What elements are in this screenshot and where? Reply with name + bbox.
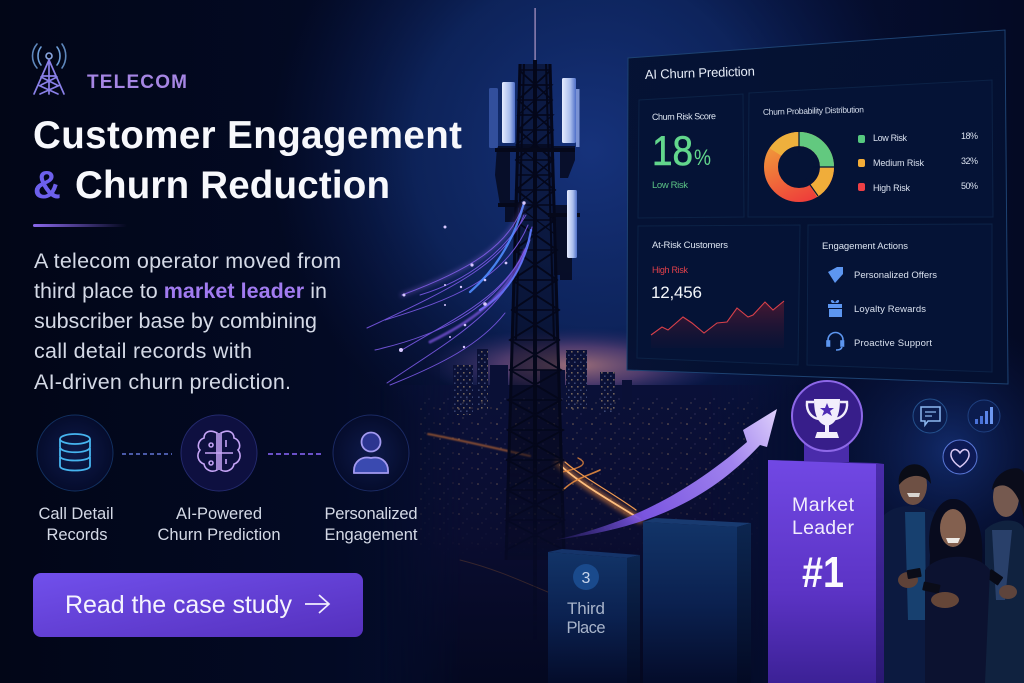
city skyline at night	[420, 349, 762, 683]
description paragraph: A telecom operator moved from	[34, 249, 341, 273]
title: &	[33, 164, 61, 207]
legend: Medium Risk	[873, 158, 924, 168]
icon: database	[60, 434, 90, 470]
icon: price tag	[828, 267, 843, 283]
description paragraph: AI-driven churn prediction.	[34, 370, 291, 394]
step: Personalized Engagement	[324, 415, 418, 544]
icon: person	[354, 432, 388, 473]
card: churn probability distribution: Churn Probability Distribution	[763, 104, 864, 117]
step: Call Detail Records: Call Detail	[38, 505, 114, 523]
bar: second place	[643, 518, 751, 683]
telecom tower	[489, 8, 580, 588]
step: AI-Powered Churn Prediction: AI-Powered	[176, 505, 262, 523]
area chart	[651, 301, 784, 348]
card: engagement actions: Engagement Actions	[822, 241, 908, 252]
header icon: telecom tower	[32, 44, 66, 94]
rank badge 3	[573, 564, 599, 590]
description paragraph	[34, 249, 341, 394]
panel heading: AI Churn Prediction	[645, 64, 755, 82]
step: Personalized Engagement: Engagement	[324, 526, 418, 544]
title underline	[33, 224, 127, 227]
card: churn risk score: Churn Risk Score	[652, 111, 716, 122]
bar: market leader	[768, 440, 884, 683]
person: man	[884, 464, 948, 683]
bar: market leader: Leader	[792, 517, 854, 539]
button: read the case study: Read the case study	[65, 591, 292, 619]
trophy badge	[792, 381, 862, 451]
connector dots	[268, 453, 322, 455]
card: engagement actions: Proactive Support	[854, 338, 932, 349]
button: read the case study	[33, 573, 363, 637]
legend: 18%	[961, 131, 978, 141]
step: AI-Powered Churn Prediction: Churn Prediction	[158, 526, 280, 544]
card: at-risk customers	[637, 225, 800, 365]
card: at-risk customers: At-Risk Customers	[652, 240, 728, 251]
bar: third place	[548, 549, 640, 683]
floating icon: chat	[913, 399, 947, 433]
step: Call Detail Records	[37, 415, 114, 544]
legend	[858, 131, 978, 193]
card: churn probability distribution	[748, 80, 993, 217]
person: woman at right	[985, 468, 1024, 683]
description paragraph: subscriber base by combining	[34, 309, 317, 333]
icon: arrow	[305, 595, 329, 613]
card: churn risk score: 18	[652, 127, 693, 174]
icon: brain	[198, 431, 240, 471]
title: Customer Engagement	[33, 114, 462, 157]
bar: market leader: Market	[792, 494, 855, 516]
icon: gift	[828, 300, 842, 317]
floating icon: signal bars	[968, 400, 1000, 432]
card: engagement actions	[807, 224, 992, 372]
dashboard panel: AI Churn Prediction	[627, 30, 1008, 384]
floating icon: heart	[943, 440, 977, 474]
legend: High Risk	[873, 183, 910, 193]
bar: third place: Third	[567, 599, 605, 618]
description paragraph: call detail records with	[34, 339, 252, 363]
card: churn risk score: %	[694, 145, 711, 170]
bar: third place: Place	[566, 619, 606, 637]
icon: trophy	[814, 399, 840, 438]
card: engagement actions: Loyalty Rewards	[854, 304, 926, 315]
legend: Low Risk	[873, 133, 908, 143]
person: woman at center	[922, 499, 990, 683]
card: churn risk score	[638, 94, 744, 218]
description paragraph: third place to market leader in	[34, 279, 327, 303]
legend: 32%	[961, 156, 978, 166]
title: Churn Reduction	[75, 164, 390, 207]
card: at-risk customers: High Risk	[652, 265, 688, 275]
connector dots	[122, 453, 172, 455]
label: TELECOM: TELECOM	[87, 72, 187, 93]
card: at-risk customers: 12,456	[651, 283, 702, 302]
icon: headset	[827, 333, 844, 350]
growth arrow	[555, 409, 777, 540]
bar: market leader: #1	[802, 548, 844, 597]
bar: third place: 3	[582, 570, 591, 587]
step: Personalized Engagement: Personalized	[324, 505, 418, 523]
data light streams from tower	[367, 201, 532, 385]
card: churn risk score: Low Risk	[652, 180, 688, 191]
step: Call Detail Records: Records	[46, 526, 108, 544]
highway light trails	[428, 434, 640, 595]
title	[33, 114, 462, 207]
people with smartphones	[884, 464, 1024, 683]
donut chart	[771, 132, 834, 196]
legend: 50%	[961, 181, 978, 191]
step: AI-Powered Churn Prediction	[158, 415, 280, 544]
card: engagement actions: Personalized Offers	[854, 270, 937, 281]
